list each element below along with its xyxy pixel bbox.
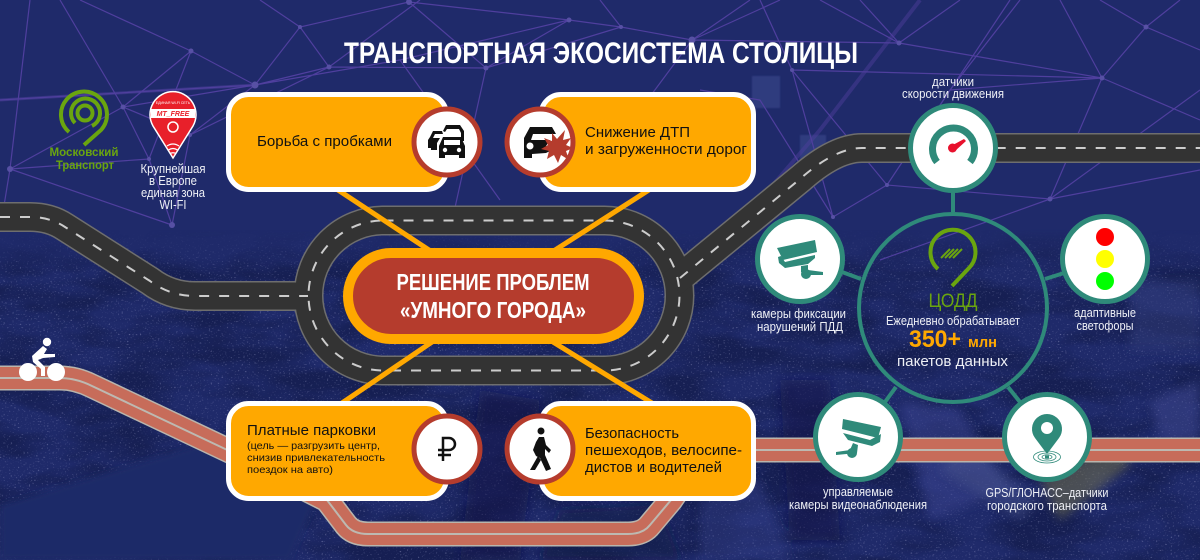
node: violation cameras bbox=[751, 216, 846, 334]
card: accident reduction: Снижение ДТП bbox=[585, 124, 690, 141]
logo: MT_FREE wifi: MT_FREE bbox=[157, 111, 190, 118]
icon: car crash bbox=[507, 109, 573, 175]
card: accident reduction: и загруженности дорог bbox=[585, 141, 748, 158]
running and cycling track bbox=[0, 378, 1200, 534]
TsODD hub circle bbox=[842, 192, 1064, 402]
TsODD hub circle: млн bbox=[968, 335, 997, 351]
node: GPS sensors: GPS/ГЛОНАСС–датчики bbox=[986, 486, 1109, 500]
icon: pedestrian bbox=[507, 416, 573, 482]
node: speed sensors bbox=[902, 75, 1004, 190]
node: violation cameras: нарушений ПДД bbox=[757, 320, 843, 334]
central pill bbox=[348, 253, 639, 339]
card: paid parking: Платные парковки bbox=[247, 422, 376, 439]
card: traffic jams: Борьба с пробками bbox=[257, 133, 392, 150]
node: adaptive traffic lights bbox=[1062, 216, 1148, 333]
wifi caption: Крупнейшая bbox=[140, 162, 206, 176]
node: controlled cameras: управляемые bbox=[823, 485, 893, 499]
TsODD hub circle: пакетов данных bbox=[897, 353, 1008, 370]
icon: ruble bbox=[414, 416, 480, 482]
card: paid parking bbox=[228, 404, 480, 498]
node: violation cameras: камеры фиксации bbox=[751, 307, 846, 321]
node: adaptive traffic lights: светофоры bbox=[1076, 319, 1134, 333]
icon: TsODD logo bbox=[930, 230, 975, 286]
node: GPS sensors: городского транспорта bbox=[987, 499, 1107, 513]
logo: MT_FREE wifi: ЕДИНАЯ WI-FI СЕТЬ bbox=[156, 101, 191, 105]
icon: cars in traffic bbox=[414, 109, 480, 175]
wifi caption bbox=[140, 162, 206, 212]
card: traffic jams bbox=[228, 94, 480, 190]
logo: MT_FREE wifi bbox=[150, 92, 196, 158]
central pill: «УМНОГО ГОРОДА» bbox=[400, 297, 586, 323]
logo: Moscow Transport: Московский bbox=[50, 147, 118, 159]
card: safety: дистов и водителей bbox=[585, 459, 722, 476]
road network bbox=[0, 148, 1200, 370]
node: controlled cameras: камеры видеонаблюдения bbox=[789, 498, 927, 512]
TsODD hub circle: 350+ bbox=[909, 326, 961, 353]
logo: Moscow Transport bbox=[50, 92, 118, 172]
node: controlled cameras bbox=[789, 394, 927, 512]
node: speed sensors: датчики bbox=[932, 75, 974, 89]
wifi caption: WI-FI bbox=[160, 198, 186, 212]
icon: cyclist bbox=[19, 338, 65, 381]
logo: Moscow Transport: Транспорт bbox=[56, 160, 114, 172]
orange connectors bbox=[335, 188, 652, 403]
card: paid parking: поездок на авто) bbox=[247, 464, 333, 476]
wifi caption: единая зона bbox=[141, 186, 205, 200]
title: ТРАНСПОРТНАЯ ЭКОСИСТЕМА СТОЛИЦЫ bbox=[344, 37, 858, 70]
node: adaptive traffic lights: адаптивные bbox=[1074, 306, 1136, 320]
node: speed sensors: скорости движения bbox=[902, 87, 1004, 101]
wifi caption: в Европе bbox=[149, 174, 197, 188]
central pill: РЕШЕНИЕ ПРОБЛЕМ bbox=[396, 269, 590, 295]
card: accident reduction bbox=[507, 94, 754, 190]
TsODD hub circle: Ежедневно обрабатывает bbox=[886, 314, 1020, 328]
card: safety bbox=[507, 404, 754, 498]
TsODD hub circle: ЦОДД bbox=[928, 291, 978, 312]
card: safety: пешеходов, велосипе- bbox=[585, 442, 742, 459]
card: paid parking: (цель — разгрузить центр, bbox=[247, 440, 380, 452]
card: paid parking: снизив привлекательность bbox=[247, 452, 386, 464]
node: GPS sensors bbox=[986, 394, 1109, 513]
card: safety: Безопасность bbox=[585, 425, 679, 442]
